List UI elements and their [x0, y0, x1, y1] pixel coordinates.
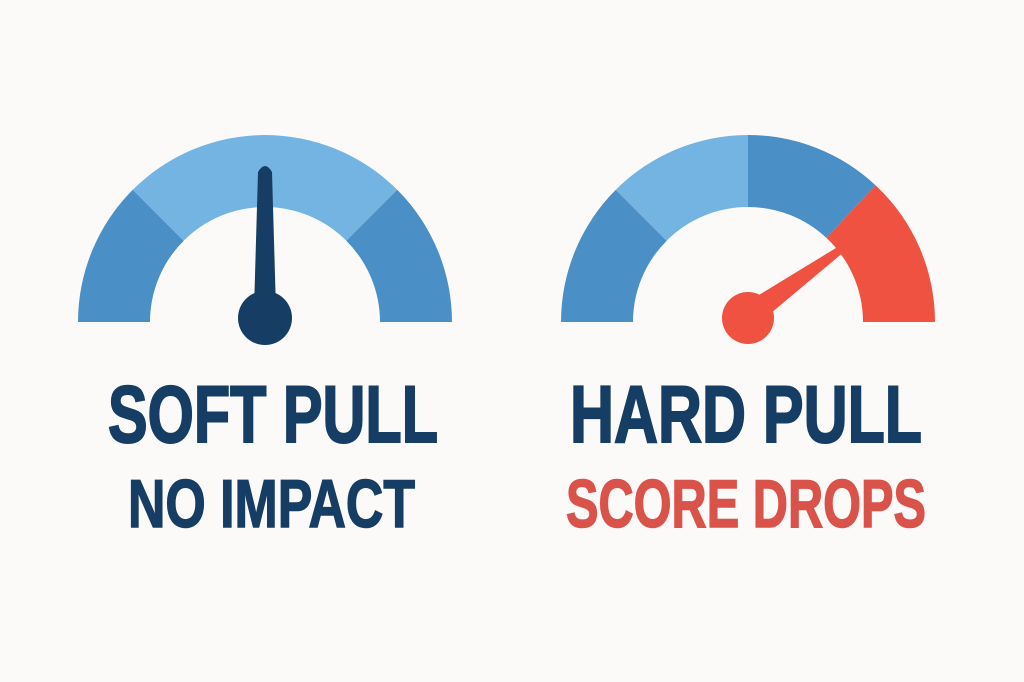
heading: soft pull: SOFT PULL	[108, 370, 438, 460]
needle: soft pull	[238, 166, 292, 345]
gauge: hard pull	[561, 135, 935, 344]
gauge: soft pull	[78, 135, 452, 345]
heading: hard pull: HARD PULL	[570, 370, 922, 460]
needle: hard pull	[722, 240, 853, 344]
subheading: no impact: NO IMPACT	[128, 466, 415, 542]
